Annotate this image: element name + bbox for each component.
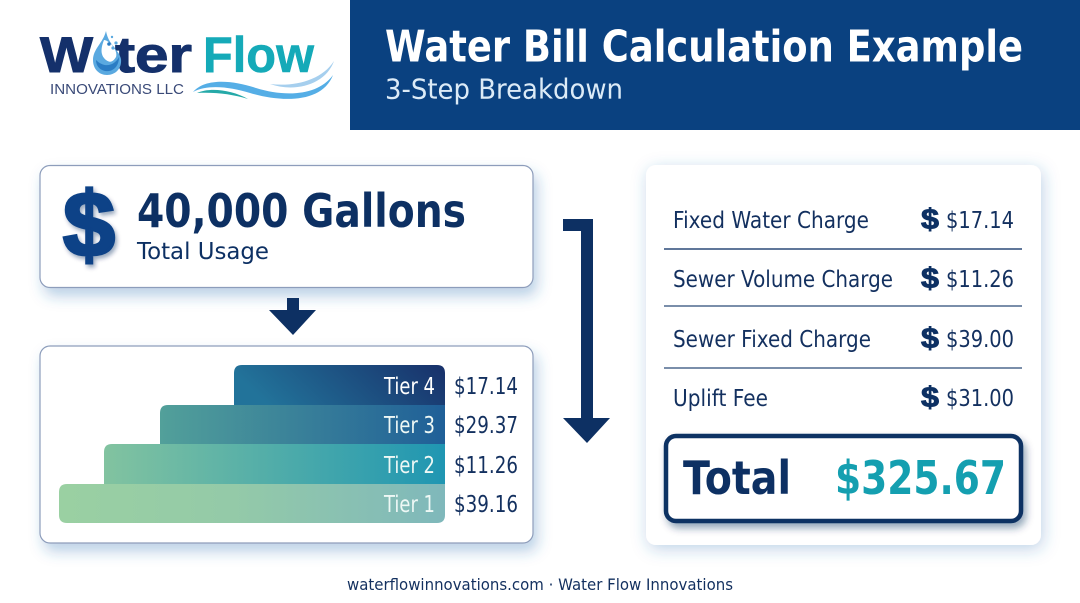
total label: Total (683, 451, 791, 505)
arrow: tiers to charges (563, 219, 610, 443)
row: fixed water charge: $17.14 (946, 208, 1014, 234)
row: sewer fixed charge: Sewer Fixed Charge (673, 327, 871, 353)
bar: tier 1 (59, 484, 518, 523)
logo wordmark: Water: W (40, 27, 94, 83)
row: fixed water charge (673, 204, 1014, 236)
callout: total (666, 436, 1021, 521)
row: uplift fee: $31.00 (946, 386, 1014, 412)
header banner (350, 0, 1080, 130)
bar: tier 1: $39.16 (454, 492, 518, 518)
icon: water drop (93, 31, 121, 75)
bar: tier 4: $17.14 (454, 374, 518, 400)
row: fixed water charge: $ (921, 204, 939, 236)
panel: charges and total (646, 165, 1041, 545)
arrow: usage to tiers (269, 298, 316, 335)
usage figure: 40,000 Gallons (137, 184, 466, 238)
bar: tier 2 (104, 444, 518, 484)
subtitle: 3-Step Breakdown (385, 72, 623, 106)
logo wordmark: Water (40, 27, 192, 83)
logo waves (193, 61, 334, 99)
panel: total usage (40, 166, 533, 288)
logo wordmark: Water: ter (115, 27, 192, 83)
bar: tier 2: $11.26 (454, 453, 518, 479)
logo: Water Flow Innovations LLC (40, 27, 334, 99)
bar: tier 3 (160, 405, 518, 444)
bar: tier 2: Tier 2 (383, 453, 435, 479)
total amount: $325.67 (835, 451, 1006, 505)
row: sewer volume charge: $11.26 (946, 267, 1014, 293)
icon: dollar sign: $ (63, 174, 115, 276)
row: sewer volume charge (673, 263, 1014, 295)
row: uplift fee: Uplift Fee (673, 386, 768, 412)
bar: tier 4 (234, 365, 518, 405)
footer: waterflowinnovations.com · Water Flow Innovations (347, 575, 733, 594)
row: sewer fixed charge (673, 323, 1014, 355)
bar: tier 4: Tier 4 (383, 374, 435, 400)
bar: tier 1: Tier 1 (383, 492, 435, 518)
row: sewer fixed charge: $ (921, 323, 939, 355)
usage label: Total Usage (136, 239, 269, 265)
row: uplift fee: $ (921, 382, 939, 414)
bar: tier 3: $29.37 (454, 413, 518, 439)
row: uplift fee (673, 382, 1014, 414)
logo wordmark: Flow: Flow (203, 27, 314, 83)
panel: tier chart (40, 346, 533, 543)
row: sewer volume charge: Sewer Volume Charge (673, 267, 893, 293)
logo subtitle: INNOVATIONS LLC (50, 81, 184, 98)
row: sewer volume charge: $ (921, 263, 939, 295)
bar: tier 3: Tier 3 (383, 413, 435, 439)
row: sewer fixed charge: $39.00 (946, 327, 1014, 353)
row: fixed water charge: Fixed Water Charge (673, 208, 869, 234)
